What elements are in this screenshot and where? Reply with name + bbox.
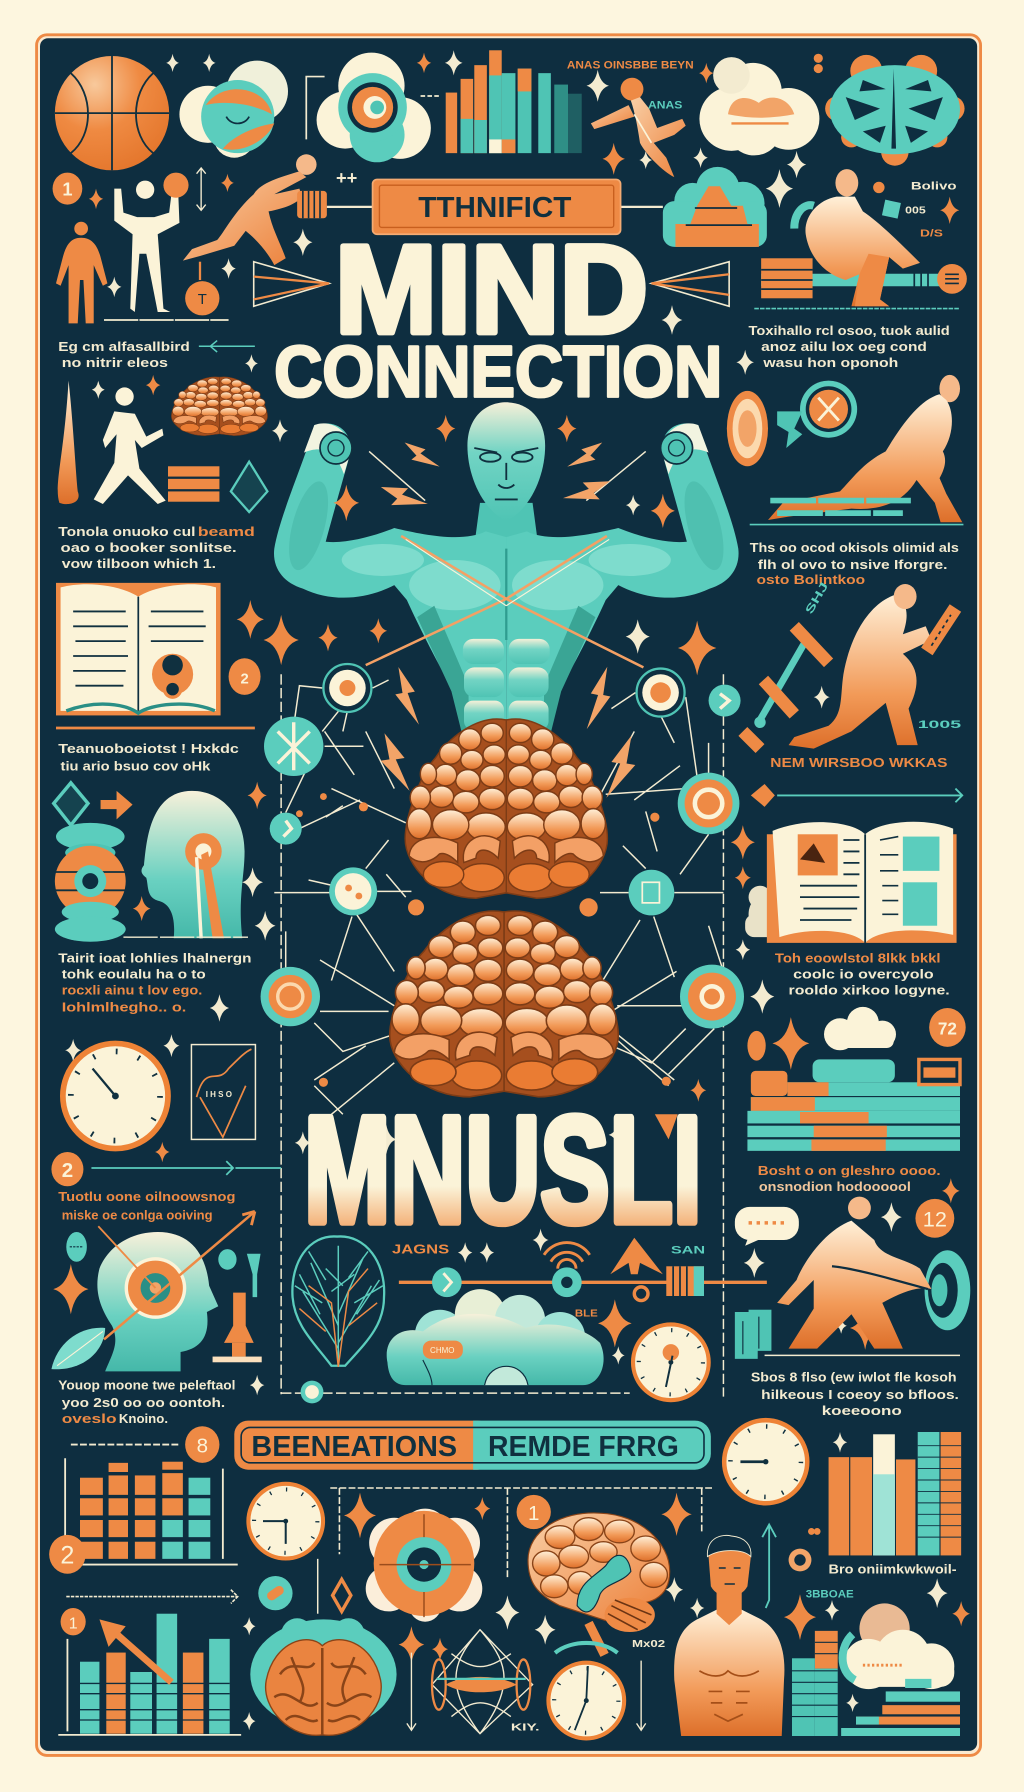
text block: upper left <box>58 339 190 370</box>
icon: small orange medal <box>789 1528 821 1571</box>
icon: orange pennant <box>655 1114 678 1139</box>
banner: subtitle: TTHNIFICT <box>418 192 572 224</box>
abdominal muscles <box>463 639 550 730</box>
network nodes <box>261 664 744 1087</box>
arrow: teal right <box>751 784 962 807</box>
lower brain <box>390 911 618 1097</box>
text block: left second: Tonola onuoko cul <box>58 524 195 539</box>
icon: bar stack right <box>747 1007 966 1151</box>
icon: cloud with orange heart <box>699 57 819 155</box>
icon: number one badge <box>53 173 82 205</box>
caption: right chart: Bro oniimkwkwoil- <box>829 1562 957 1577</box>
arrow: double vertical <box>197 168 206 210</box>
icon: brain with eye <box>366 1509 482 1622</box>
icon: teal and orange stack <box>55 823 126 942</box>
icon: orange mark <box>814 54 823 73</box>
badge: twelve: 12 <box>923 1206 947 1231</box>
text block: left fifth: miske oe conlga ooiving <box>62 1207 213 1222</box>
text block: left fourth: tohk eoulalu ha o to <box>62 966 206 981</box>
badge: two <box>49 1535 86 1574</box>
caption: wire diagram: KIY. <box>511 1722 540 1733</box>
icon: lifter with barbell <box>183 154 663 265</box>
caption: teal: 3BBOAE <box>806 1589 854 1601</box>
icon: orange bulb: T <box>198 292 207 308</box>
icon: orange small ring <box>634 1287 648 1301</box>
labels: squat side notes: Bolivo <box>911 181 957 193</box>
text block: right second: osto Bolintkoo <box>757 572 865 587</box>
icon: gauge clock <box>633 1324 709 1400</box>
icon: muscle wire diagram <box>432 1630 533 1734</box>
text block: right third: rooldo xirkoo logyne. <box>789 982 950 997</box>
text block: left sixth <box>58 1378 235 1426</box>
arrow: down left <box>407 1653 416 1730</box>
icon: target head <box>51 1211 262 1371</box>
icon: stacked orange bars <box>168 466 219 502</box>
icon: wall clock left <box>63 1043 168 1149</box>
text block: right second: flh ol ovo to nsive Iforgre. <box>758 557 947 572</box>
icon: clock right <box>724 1420 807 1503</box>
text block: right fourth <box>758 1163 941 1194</box>
neck and traps <box>418 503 594 617</box>
text block: upper right: wasu hon oponoh <box>762 355 898 370</box>
labels: signal row: SAN <box>671 1245 705 1257</box>
icon: side brain <box>528 1513 670 1655</box>
text block: right second <box>750 540 959 587</box>
icon: teal block <box>735 1310 771 1359</box>
icon: cloud lower right <box>843 1603 954 1689</box>
labels: dumbbell: SHJ <box>804 581 831 616</box>
caption: side brain: Mx02 <box>632 1639 666 1650</box>
badge: number two <box>51 1152 83 1186</box>
icon: bottom clock <box>548 1643 624 1738</box>
text block: right fourth: onsnodion hodoooool <box>759 1179 911 1194</box>
arrow: orange <box>101 791 133 819</box>
arrow: long right <box>66 1559 318 1614</box>
text block: left fourth: rocxli ainu t lov ego. <box>62 982 202 997</box>
icon: squatting lifter <box>754 169 967 309</box>
text block: left fourth: Tairit ioat lohlies lhalnergn <box>58 950 251 965</box>
icon: cloud with pyramid <box>663 167 767 247</box>
labels: squat side notes <box>905 181 957 240</box>
title: MIND: MIND <box>335 219 648 360</box>
banner: benefits <box>234 1421 711 1470</box>
badge: two: 2 <box>60 1541 74 1569</box>
arrow: teal to diagram <box>91 1161 281 1175</box>
banner: benefits: BEENEATIONS <box>251 1431 457 1463</box>
arms and torso <box>274 423 506 737</box>
icon: teal cloud <box>387 1289 604 1385</box>
nerve signal cross lines <box>366 451 646 667</box>
icon: clock lower left <box>248 1483 324 1559</box>
text block: left second: vow tilboon which 1. <box>62 556 216 571</box>
left pointer triangle <box>254 262 329 306</box>
icon: orange numbered circle <box>229 658 261 695</box>
text block: left second: oao o booker sonlitse. <box>61 540 237 555</box>
icon: open book right <box>745 822 957 943</box>
icon: walking figure <box>94 387 166 504</box>
text block: right fifth <box>751 1370 959 1418</box>
text block: right third: Toh eoowlstol 8lkk bkkl <box>775 950 941 965</box>
text block: right fifth: hilkeous I coeoy so bfloos. <box>761 1387 959 1402</box>
icon: kneeling man <box>750 375 963 525</box>
text block: right fifth: koeeoono <box>822 1403 902 1418</box>
labels: dumbbell <box>804 581 962 731</box>
icon: orange diamond <box>333 1579 351 1611</box>
connector lines <box>274 674 723 1397</box>
bar chart: top <box>446 50 582 153</box>
icon: teal and orange brain <box>825 55 965 166</box>
arrow: teal left <box>199 341 255 352</box>
banner: subtitle <box>373 179 621 234</box>
text block: left sixth: Youop moone twe peleftaol <box>58 1378 235 1393</box>
icon: teal cloud: CHMO <box>430 1346 455 1355</box>
text block: upper right: anoz ailu lox oeg cond <box>761 339 927 354</box>
text block: left second: beamd <box>198 524 255 539</box>
icon: orange bulb <box>104 262 229 320</box>
text block: upper right <box>749 323 950 370</box>
icon: speech bubble <box>735 1207 799 1246</box>
title: CONNECTION: CONNECTION <box>274 333 722 413</box>
text block: left third <box>58 741 239 773</box>
text block: left fourth <box>58 950 251 1014</box>
text block: upper right: Toxihallo rcl osoo, tuok aulid <box>749 323 950 338</box>
labels: signal row: BLE <box>575 1309 598 1320</box>
text block: right second: Ths oo ocod okisols olimid als <box>750 540 959 555</box>
dashed bracket <box>330 1488 712 1577</box>
icon: cloud with eye rings <box>306 53 440 162</box>
text block: left third: tiu ario bsuo cov oHk <box>61 758 211 773</box>
badge: one: 1 <box>528 1502 539 1525</box>
lightning bolts <box>378 433 635 798</box>
icon: cloud with swirl face <box>179 61 288 158</box>
labels: squat side notes: D/S <box>920 229 943 240</box>
text block: left fourth: Iohlmlhegho.. o. <box>62 999 186 1014</box>
title: MNUSLI: MNUSLI <box>304 1085 702 1254</box>
icon: bar stack right: 72 <box>938 1018 957 1038</box>
bar chart: lower left with arrow <box>58 1608 241 1735</box>
icon: teal head profile <box>123 791 248 938</box>
upper brain <box>405 719 607 898</box>
small plus marks: ++ <box>336 167 357 188</box>
text block: left sixth: oveslo <box>62 1411 117 1426</box>
text block: left sixth: Knoino. <box>119 1411 168 1426</box>
central muscular figure <box>274 402 739 737</box>
icon: teal zig <box>777 411 802 448</box>
small caption top: ANAS OINSBBE BEYN <box>567 60 694 72</box>
badge: eight <box>185 1426 219 1463</box>
icon: lunging man at target <box>765 1197 970 1355</box>
icon: orange numbered circle: 2 <box>240 671 249 687</box>
icon: running figure <box>591 78 686 177</box>
label: runner: ANAS <box>648 100 683 112</box>
text block: right fifth: Sbos 8 flso (ew iwlot fle kosoh <box>751 1370 957 1385</box>
right pointer triangle <box>651 262 729 306</box>
labels: squat side notes: 005 <box>905 206 926 217</box>
line graph: left: I H S O <box>206 1090 232 1099</box>
icon: ribbon strip <box>58 381 79 504</box>
banner: benefits: REMDE FRRG <box>488 1431 679 1463</box>
line graph: left <box>191 1045 255 1139</box>
text block: right third: coolc io overcyolo <box>793 966 934 981</box>
icon: man with dumbbells <box>743 584 955 749</box>
icon: small brain <box>171 377 267 436</box>
text block: left third: Teanuoboeiotst ! Hxkdc <box>58 741 239 756</box>
icon: orange standing person <box>56 222 107 323</box>
bar chart: left upper <box>65 1445 238 1565</box>
text block: left fifth <box>58 1189 235 1222</box>
icon: basketball <box>55 56 169 170</box>
badge: number two: 2 <box>62 1159 73 1182</box>
signal row <box>399 1238 767 1297</box>
labels: signal row: JAGNS <box>392 1242 449 1257</box>
badge: eight: 8 <box>197 1435 208 1458</box>
text block: left second <box>58 524 255 571</box>
text block: upper left: Eg cm alfasallbird <box>58 339 190 354</box>
icon: orange oval organ <box>727 391 768 466</box>
bar chart: right <box>829 1432 961 1555</box>
text block: left fifth: Tuotlu oone oilnoowsnog <box>58 1189 235 1204</box>
text block: left sixth: yoo 2s0 oo oo oontoh. <box>62 1395 225 1410</box>
icon: teal diamond small <box>54 783 88 825</box>
caption: orange: NEM WIRSBOO WKKAS <box>770 755 948 770</box>
icon: cream figure lifting ball <box>114 173 189 312</box>
face <box>474 448 538 499</box>
arrow: teal upward <box>762 1525 776 1608</box>
text block: upper left: no nitrir eleos <box>62 355 168 370</box>
slider indicator <box>301 1381 323 1403</box>
icon: open book left <box>56 583 255 728</box>
icon: teal diamond <box>231 462 267 512</box>
arrow: down right <box>637 1661 646 1730</box>
text block: right third <box>775 950 950 997</box>
icon: bottom brain <box>250 1618 397 1735</box>
icon: neural tree brain <box>292 1236 384 1367</box>
bars lower right <box>792 1631 960 1736</box>
icon: number one badge: 1 <box>62 178 73 199</box>
labels: signal row <box>392 1242 705 1320</box>
icon: crossed circle <box>800 381 857 438</box>
badge: one <box>517 1495 551 1529</box>
badge: twelve <box>915 1199 954 1238</box>
text block: right fourth: Bosht o on gleshro oooo. <box>758 1163 941 1178</box>
icon: muscular man <box>674 1535 784 1736</box>
head <box>467 402 545 521</box>
labels: dumbbell: 1005 <box>918 719 962 731</box>
bar chart: lower left with arrow: 1 <box>69 1616 78 1633</box>
